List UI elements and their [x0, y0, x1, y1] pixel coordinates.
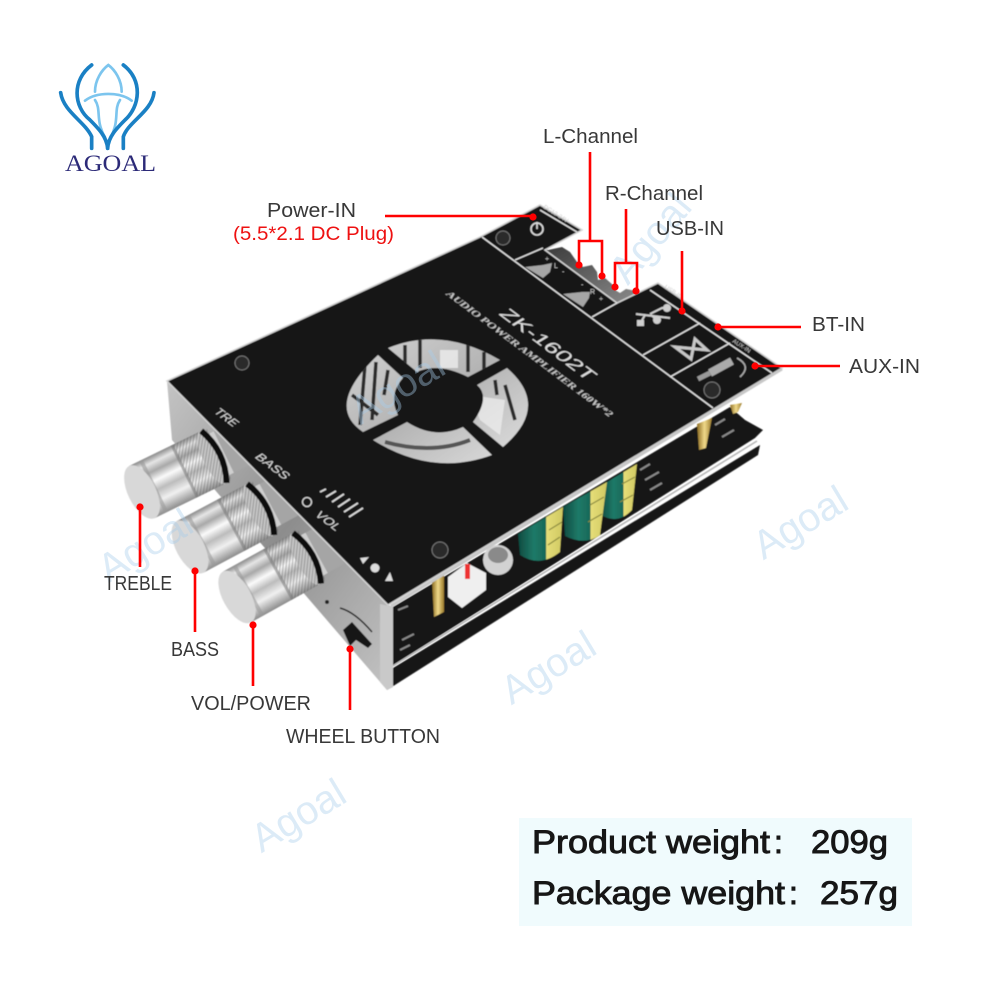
board subtitle: AUDIO POWER AMPLIFIER 160W*2 [443, 290, 615, 418]
infographic canvas [58, 63, 918, 926]
lower PCB layers [387, 407, 763, 690]
watermarks: Agoal [745, 478, 856, 568]
icon: speakers: + [599, 296, 603, 303]
white connector [448, 563, 486, 608]
port labels: USB-IN [663, 285, 683, 301]
weight panel [519, 818, 912, 926]
weight panel: : [774, 824, 783, 860]
screws [235, 231, 720, 558]
watermarks: Agoal [243, 771, 354, 861]
top plate [167, 205, 782, 606]
watermarks: Agoal [342, 343, 453, 433]
terminal block [543, 247, 640, 303]
icon: USB [636, 305, 670, 325]
product photo: amplifier board [117, 205, 782, 690]
callouts: red dots [136, 213, 759, 653]
watermarks: Agoal [493, 623, 604, 713]
icon: power [531, 222, 543, 235]
port labels: AUX-IN [731, 339, 751, 355]
knob labels on board: VOL [312, 509, 345, 533]
icon: bluetooth [675, 339, 707, 359]
callout labels: BT-IN [812, 314, 865, 336]
watermarks: Agoal [90, 501, 201, 591]
fan heat sink [346, 338, 529, 464]
weight panel: 257g [820, 875, 898, 911]
logo wordmark: AGOAL [65, 151, 156, 176]
callouts: red leader lines [140, 152, 840, 710]
board title: ZK-1602T [494, 306, 601, 384]
callout labels: Power-IN [267, 200, 356, 222]
callout labels: VOL/POWER [191, 693, 311, 715]
icon: speakers: - [581, 282, 584, 289]
callout labels: USB-IN [656, 218, 724, 240]
knob labels on board: TRE [211, 406, 243, 429]
callout labels [104, 126, 920, 748]
knob labels on board: BASS [252, 451, 294, 481]
icon: speakers: L [554, 263, 558, 270]
callout labels: (5.5*2.1 DC Plug) [233, 224, 394, 245]
icon: audio jack [698, 358, 745, 379]
weight panel: : [789, 875, 798, 911]
volume bars [320, 489, 363, 517]
weight panel: Product weight [532, 824, 770, 860]
port labels [542, 205, 751, 355]
icon: speakers: - [562, 269, 565, 276]
logo: AGOAL [61, 65, 156, 176]
knob labels on board [211, 406, 345, 533]
callout labels: AUX-IN [849, 356, 920, 378]
knob: bass [164, 470, 301, 579]
port labels: DC12-24V [542, 205, 569, 225]
callout labels: TREBLE [104, 573, 172, 595]
side plate and wheel button [167, 381, 393, 690]
knob: treble [117, 418, 254, 524]
callout labels: BASS [171, 639, 219, 661]
icon: speakers [525, 256, 603, 307]
callout labels: L-Channel [543, 126, 638, 148]
callout labels: R-Channel [605, 183, 703, 205]
weight panel: Package weight [532, 875, 785, 911]
icon: speakers: + [545, 256, 549, 263]
gold standoffs [432, 403, 742, 617]
callout labels: WHEEL BUTTON [286, 726, 440, 748]
logo mark [61, 65, 154, 148]
icon: speakers: R [590, 289, 595, 296]
watermarks: Agoal [601, 185, 701, 292]
capacitors [483, 464, 637, 575]
power and wheel symbols [302, 498, 393, 581]
watermarks [90, 185, 856, 861]
weight panel: 209g [811, 824, 888, 860]
knob: volume [211, 518, 347, 629]
